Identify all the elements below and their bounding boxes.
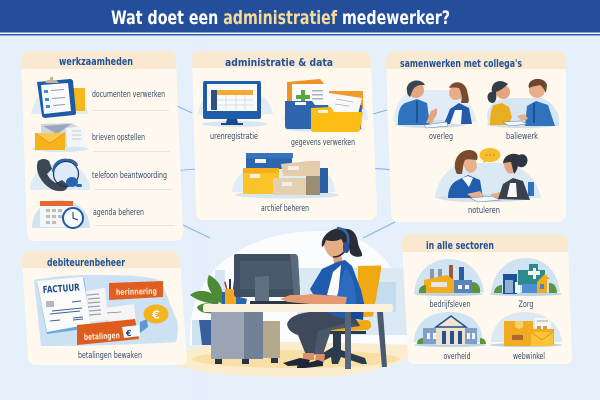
neck (333, 254, 344, 271)
icon: government building (414, 312, 486, 347)
label: archief beheren: archief beheren (261, 204, 309, 214)
heading: administratie & data: administratie & data (225, 56, 333, 69)
icon: baliewerk, two people (487, 79, 559, 128)
monitor (234, 254, 320, 304)
label: brieven opstellen: brieven opstellen (92, 133, 145, 143)
icon: calendar and clock (32, 200, 90, 228)
label: notuleren: notuleren (468, 206, 500, 216)
label: bedrijfsleven: bedrijfsleven (430, 300, 470, 310)
heading: in alle sectoren: in alle sectoren (426, 239, 494, 252)
jacket (310, 260, 364, 318)
label: agenda beheren: agenda beheren (93, 208, 144, 218)
label: documenten verwerken: documenten verwerken (92, 90, 165, 100)
orange tag: herinnering: herinnering (116, 287, 157, 298)
icon: speech bubble (480, 148, 500, 163)
icon: healthcare building (490, 258, 562, 296)
icon: euro coin: € (151, 308, 160, 322)
icon: phone and headset (30, 159, 90, 191)
icon: notuleren, two people with speech bubble (435, 148, 541, 202)
heading: werkzaamheden: werkzaamheden (59, 55, 133, 68)
heading: debiteurenbeheer: debiteurenbeheer (47, 256, 125, 269)
label: gegevens verwerken: gegevens verwerken (291, 138, 355, 148)
icon: factory (414, 259, 484, 296)
arms and hands (280, 294, 347, 306)
text: FACTUUR: FACTUUR (42, 282, 81, 296)
icon: envelopes (32, 123, 88, 152)
label: betalingen bewaken: betalingen bewaken (78, 351, 142, 361)
panel: werkzaamheden (21, 51, 183, 241)
face (323, 237, 344, 258)
center scene: person at desk (172, 228, 420, 377)
icon: folders (284, 79, 368, 132)
label: telefoon beantwoording: telefoon beantwoording (92, 171, 167, 181)
label: overheid: overheid (444, 352, 470, 362)
headset (333, 228, 349, 257)
icon: overleg, two people (393, 80, 477, 128)
panel: samenwerken met collega's (386, 51, 566, 222)
panel: debiteurenbeheer (22, 251, 187, 365)
trousers (287, 312, 360, 355)
label: baliewerk: baliewerk (506, 132, 538, 142)
hair and ponytail (345, 229, 362, 257)
label: webwinkel: webwinkel (513, 352, 545, 362)
chair (316, 266, 381, 364)
hair fringe (322, 228, 351, 250)
label: urenregistratie: urenregistratie (210, 132, 258, 142)
title banner (0, 0, 600, 36)
orange tag: betalingen: € (125, 329, 132, 338)
icon: clipboard (31, 77, 88, 118)
desk (203, 304, 393, 369)
orange tag: herinnering (109, 281, 163, 300)
heading: samenwerken met collega's: samenwerken met collega's (400, 57, 522, 70)
orange tag: betalingen (77, 319, 140, 345)
icon: plant (190, 275, 223, 345)
icon: pen holder (222, 279, 247, 304)
orange tag: betalingen: betalingen (84, 331, 120, 343)
icon: parcel and envelope (490, 312, 562, 347)
label: Zorg: Zorg (518, 300, 534, 310)
icon: euro coin (144, 304, 168, 324)
illustration: factuur and betalingen (34, 275, 178, 346)
title: Wat doet een administratief medewerker? (111, 7, 450, 29)
icon: archive boxes (232, 153, 339, 198)
woman (280, 228, 364, 368)
label: overleg: overleg (429, 132, 453, 142)
connector lines (174, 106, 431, 319)
icon: monitor with table (198, 81, 273, 127)
panel: in alle sectoren (402, 234, 572, 364)
panel: administratie & data (192, 51, 377, 220)
